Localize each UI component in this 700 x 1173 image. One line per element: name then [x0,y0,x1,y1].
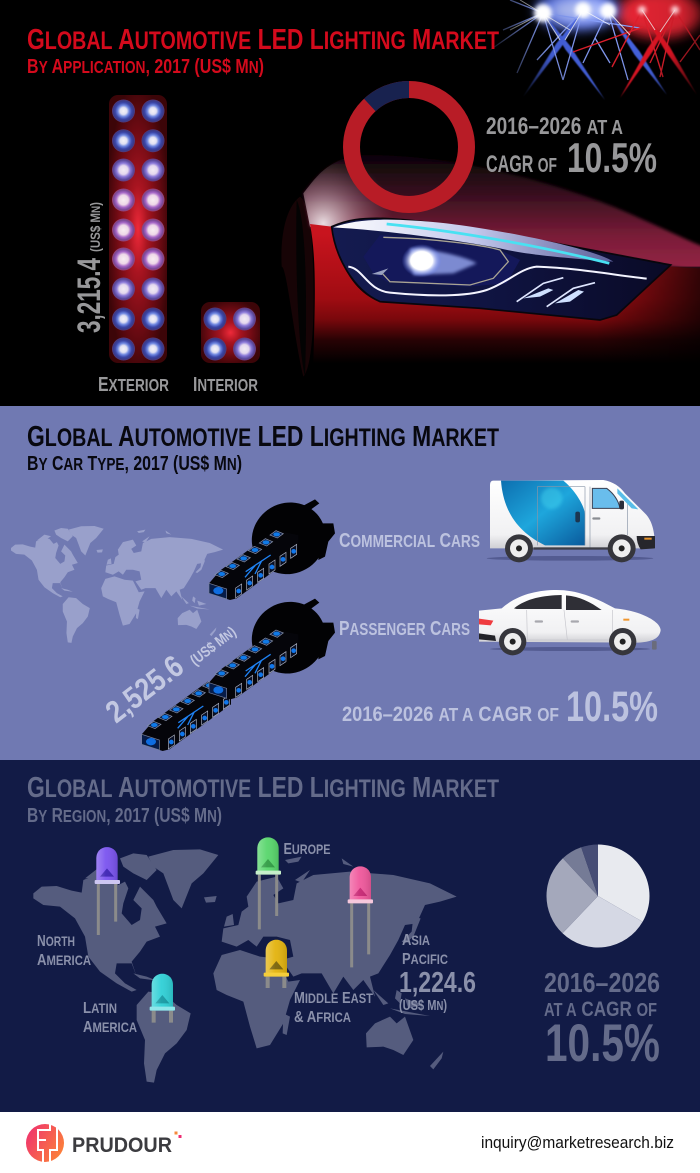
label: north america: AMERICA [37,952,91,969]
panel: by application (black) [0,0,700,406]
LED bulb: commercial [209,489,339,600]
pin: green [256,837,281,929]
CAGR callout [544,967,660,1073]
label: middle east and africa [294,990,373,1026]
unit: asia pacific: (US$ MN) [399,997,447,1014]
logo mark [26,1123,64,1164]
region labels [37,841,476,1036]
label: latin america [83,1000,137,1036]
subtitle: BY APPLICATION, 2017 (US$ MN) [27,56,264,78]
CAGR callout [342,683,658,731]
value: asia pacific: 1,224.6 [399,967,476,999]
pin: yellow [264,940,289,988]
label: middle east and africa: MIDDLE EAST [294,990,373,1007]
label: asia pacific: ASIA [402,932,430,949]
title: GLOBAL AUTOMOTIVE LED LIGHTING MARKET [27,24,499,56]
title: GLOBAL AUTOMOTIVE LED LIGHTING MARKET [27,772,499,804]
CAGR callout: 2016–2026 [544,967,660,998]
CAGR callout: CAGR OF [486,151,557,178]
title: GLOBAL AUTOMOTIVE LED LIGHTING MARKET [27,421,499,453]
panel: by car type (periwinkle) [0,406,700,760]
LED bar: interior [201,302,260,363]
pin: purple [95,847,120,935]
donut chart [352,90,466,204]
CAGR callout: 10.5% [545,1014,660,1073]
label: asia pacific [402,932,448,968]
label: passenger cars: PASSENGER CARS [339,618,470,640]
icon: sedan [479,590,661,655]
label: north america [37,933,91,969]
CAGR callout: 10.5% [566,683,658,731]
logo accent dots [174,1132,182,1138]
car front illustration [281,155,700,377]
flare cores [534,2,679,22]
label: north america: NORTH [37,933,75,950]
CAGR callout: 10.5% [567,134,657,181]
LED bulb: passenger [142,588,339,751]
pin: cyan [150,974,175,1023]
value: exterior: 3,215.4 [71,258,107,333]
pie chart [546,844,649,947]
unit: car type: (US$ MN) [187,623,239,669]
subtitle: BY CAR TYPE, 2017 (US$ MN) [27,453,242,475]
world map [33,849,457,1083]
world map [11,526,223,643]
label: commercial cars: COMMERCIAL CARS [339,530,480,552]
light flares [490,0,700,100]
label: europe: EUROPE [284,841,330,858]
logo wordmark: PRUDOUR [72,1134,172,1157]
headlight [332,218,671,320]
footer [0,1112,700,1173]
pin: pink [348,866,373,967]
contact email: inquiry@marketresearch.biz [481,1134,674,1152]
value: car type: 2,525.6 [99,648,190,730]
LED bar: exterior [109,95,167,363]
LED pins [95,837,373,1023]
label: asia pacific: PACIFIC [402,951,448,968]
panel: by region (navy) [0,760,700,1112]
label: interior: INTERIOR [193,374,258,396]
CAGR callout: 2016–2026 AT A CAGR OF [342,703,559,726]
label: latin america: LATIN [83,1000,117,1017]
label: latin america: AMERICA [83,1019,137,1036]
CAGR callout: 2016–2026 AT A [486,113,623,140]
label: middle east and africa: & AFRICA [294,1009,351,1026]
icon: van [487,480,655,562]
CAGR callout: AT A CAGR OF [544,998,657,1021]
unit: exterior: (US$ MN) [87,202,103,252]
label: exterior: EXTERIOR [98,374,169,396]
subtitle: BY REGION, 2017 (US$ MN) [27,805,222,827]
CAGR callout [486,113,657,181]
